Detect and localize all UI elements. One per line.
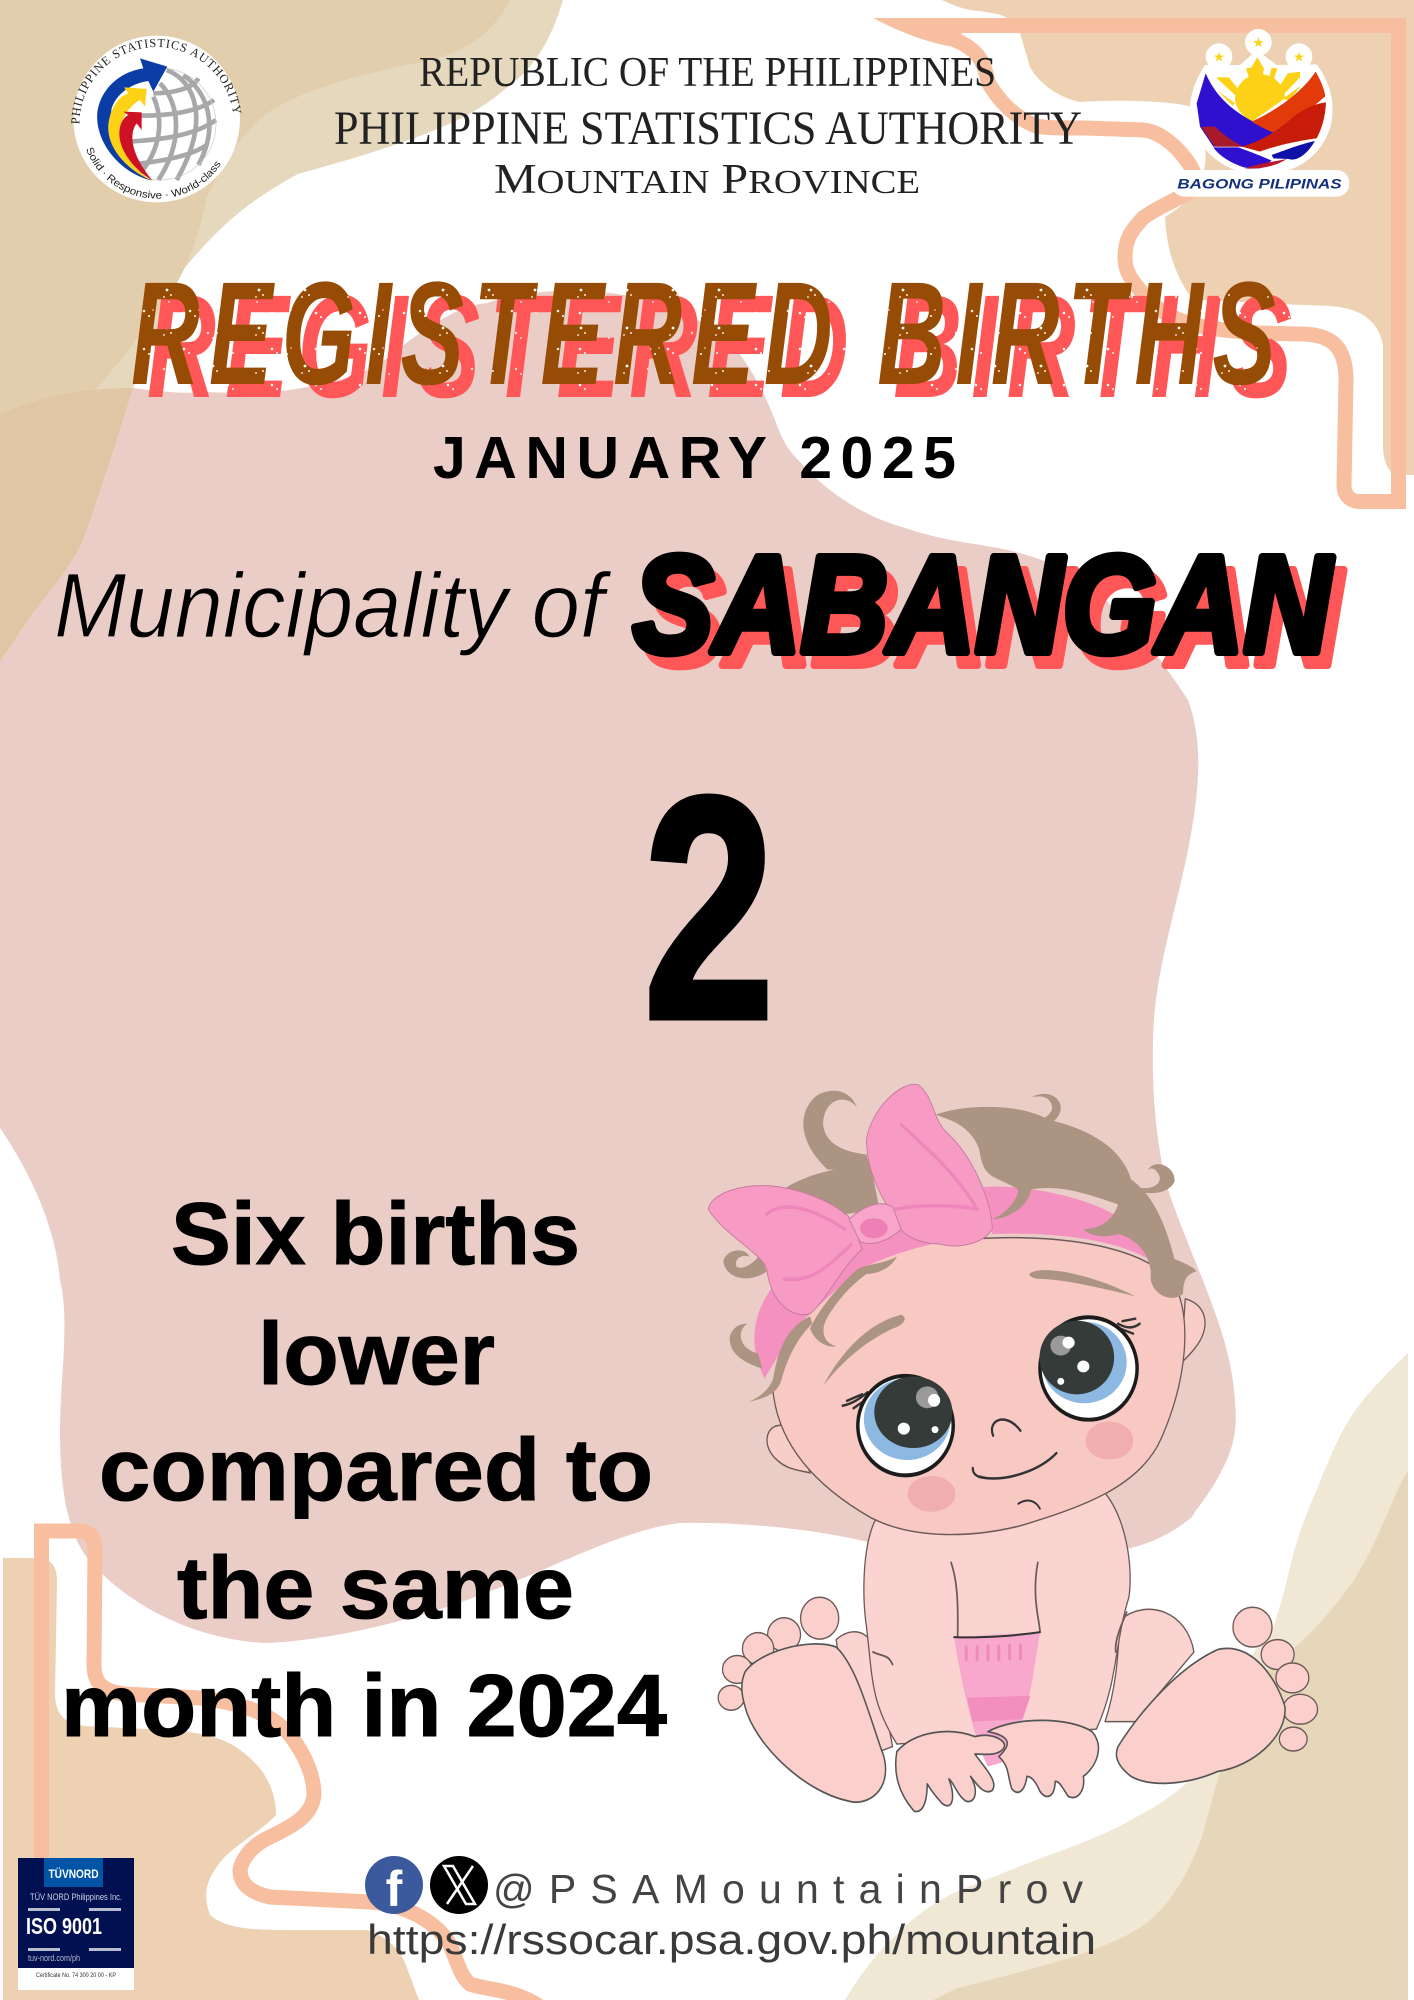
comparison statement: Six births [171, 1184, 580, 1283]
logo: Philippine Statistics Authority seal [71, 36, 242, 202]
background: top-left dark tan blob [0, 0, 510, 553]
baby headband [754, 1186, 1148, 1378]
baby ears [767, 1299, 1205, 1473]
illustration: baby [708, 1084, 1318, 1812]
shield bands [1197, 73, 1285, 147]
name face: SABANGAN [633, 528, 1334, 682]
background: top-left light tan blob [0, 0, 563, 662]
subtitle: month and year: JANUARY 2025 [433, 425, 956, 491]
badge company: TÜV NORD Philippines Inc. [30, 1892, 122, 1902]
comparison statement: lower [258, 1304, 495, 1403]
sun and rays [1216, 57, 1301, 122]
baby diaper [954, 1632, 1040, 1766]
badge ISO text: ISO 9001 [26, 1913, 102, 1939]
stars [1213, 35, 1305, 64]
baby cheeks [908, 1422, 1133, 1512]
logo: Bagong Pilipinas [1172, 29, 1349, 197]
baby bow [708, 1084, 992, 1315]
badge brand: TÜVNORD [48, 1866, 99, 1881]
background: bottom-right cream blob [845, 1353, 1408, 2000]
badge: ISO 9001 certification [18, 1858, 134, 1990]
icon: facebook [365, 1856, 423, 1917]
baby back legs [836, 1609, 1194, 1752]
baby left eye [843, 1376, 953, 1475]
comparison statement: the same [177, 1538, 574, 1637]
baby body [864, 1490, 1130, 1744]
big number: births count: 2 [643, 731, 775, 1086]
baby arm creases [873, 1562, 1127, 1664]
comparison statement: month in 2024 [61, 1656, 667, 1755]
background: left overlap tan blob [0, 388, 133, 662]
decorative ribbon: bottom left [42, 1531, 545, 2000]
globe [104, 68, 216, 180]
baby eyebrows [823, 1270, 1135, 1386]
stars: ★ [1293, 49, 1305, 64]
baby right eye [1040, 1317, 1140, 1420]
baby nose and mouth [973, 1419, 1056, 1509]
header: republic line: REPUBLIC OF THE PHILIPPINES [419, 50, 996, 96]
logo white backing [1172, 29, 1349, 197]
header: agency line: PHILIPPINE STATISTICS AUTHORITY [334, 102, 1082, 155]
comparison statement [61, 1184, 667, 1755]
badge website: tuv-nord.com/ph [28, 1953, 80, 1963]
background: bottom-right darker tan blob [933, 1470, 1408, 2000]
header: province line: MOUNTAIN PROVINCE [494, 157, 920, 203]
baby head [773, 1238, 1185, 1535]
background: large pink blob [0, 291, 1236, 1643]
seal ring text: PHILIPPINE STATISTICS AUTHORITY [71, 38, 242, 124]
label: municipality of: Municipality of [54, 555, 612, 657]
logo wordmark: BAGONG PILIPINAS [1177, 177, 1342, 192]
background: top-right tan blob [942, 0, 1414, 475]
municipality name [633, 528, 1345, 695]
seal motto text: Solid · Responsive · World-class [86, 148, 220, 199]
website url: https://rssocar.psa.gov.ph/mountain [367, 1916, 1096, 1963]
stars: ★ [1252, 35, 1264, 50]
baby feet soles [742, 1644, 1285, 1802]
icon: facebook: f [386, 1861, 403, 1917]
stars: ★ [1213, 49, 1225, 64]
baby toes [718, 1597, 1318, 1751]
decorative ribbon: top right [873, 18, 1398, 502]
icon: X [430, 1856, 488, 1914]
baby hands [896, 1720, 1098, 1812]
background: bottom-left tan blob [3, 1558, 419, 2000]
badge certificate number: Certificate No. 74 300 20 00 - KP [36, 1973, 116, 1979]
baby hair [723, 1091, 1196, 1402]
arrows [97, 58, 167, 181]
title: registered births [131, 252, 1301, 429]
comparison statement: compared to [99, 1420, 653, 1519]
social handle: @PSAMountainProv [493, 1866, 1084, 1912]
